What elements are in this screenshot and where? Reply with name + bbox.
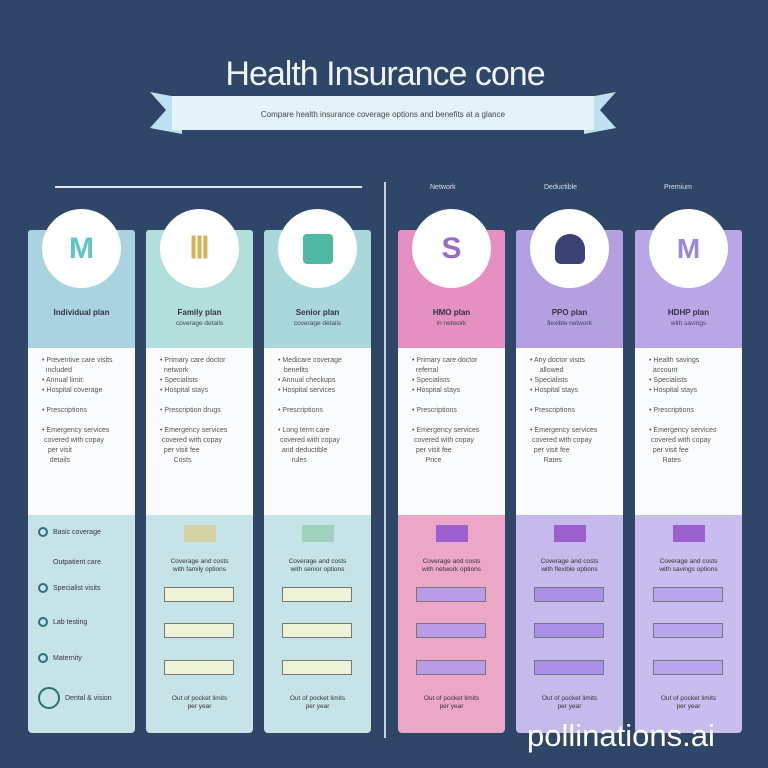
column 3: coverage details — [294, 320, 341, 327]
column 5: allowed — [540, 367, 563, 374]
vertical divider — [384, 182, 386, 738]
column 5: flexible network — [547, 320, 592, 327]
column 3: • Medicare coverage — [278, 357, 342, 364]
column 1: • Preventive care visits — [42, 357, 113, 364]
divider line left — [55, 186, 362, 188]
column 5: with flexible options — [541, 566, 598, 573]
column 1: Individual plan — [53, 308, 110, 317]
column 3: covered with copay — [280, 437, 340, 444]
column 4: HMO plan — [433, 308, 470, 317]
column 1: Specialist visits — [53, 584, 100, 592]
column 1: Outpatient care — [53, 558, 101, 566]
column 3: benefits — [284, 367, 308, 374]
column 6: with savings options — [659, 566, 718, 573]
column 5: per year — [558, 703, 581, 710]
column 2 — [146, 209, 253, 733]
column 5: covered with copay — [532, 437, 592, 444]
column 1: M — [69, 232, 94, 264]
column 3: • Long term care — [278, 427, 329, 434]
column 5 — [516, 209, 623, 733]
column 5: per visit fee — [534, 447, 570, 454]
column 4: per visit fee — [416, 447, 452, 454]
column 2: Coverage and costs — [171, 558, 228, 565]
column 1: Maternity — [53, 654, 82, 662]
column 2: • Prescription drugs — [160, 407, 221, 414]
column 1: • Emergency services — [42, 427, 109, 434]
column 1: Basic coverage — [53, 528, 101, 536]
column 3 — [264, 209, 371, 733]
column 6: per year — [677, 703, 700, 710]
column 1: per visit — [48, 447, 72, 454]
column 1: • Hospital coverage — [42, 387, 102, 394]
column 2: per year — [188, 703, 211, 710]
column 6: with savings — [671, 320, 706, 327]
column 2: Family plan — [177, 308, 222, 317]
column 6: Rates — [663, 457, 681, 464]
right headers: Deductible — [544, 184, 577, 191]
column 4: • Hospital stays — [412, 387, 460, 394]
column 6: Coverage and costs — [660, 558, 717, 565]
column 5: • Prescriptions — [530, 407, 575, 414]
column 5: Coverage and costs — [541, 558, 598, 565]
column 4 — [398, 209, 505, 733]
column 6: • Health savings — [649, 357, 699, 364]
column 1: • Annual limit: — [42, 377, 84, 384]
column 4: • Emergency services — [412, 427, 479, 434]
column 2: • Hospital stays — [160, 387, 208, 394]
column 3: Senior plan — [296, 308, 339, 317]
column 1: covered with copay — [44, 437, 104, 444]
column 1: Lab testing — [53, 618, 87, 626]
column 3: Out of pocket limits — [290, 695, 345, 702]
column 4: in network — [437, 320, 466, 327]
right headers — [430, 184, 692, 191]
column 1: • Prescriptions — [42, 407, 87, 414]
column 3: per year — [306, 703, 329, 710]
column 5: • Any doctor visits — [530, 357, 585, 364]
right headers: Premium — [664, 184, 692, 191]
column 6: account — [653, 367, 677, 374]
column 3: • Annual checkups — [278, 377, 335, 384]
column 1 — [28, 209, 135, 733]
column 2: covered with copay — [162, 437, 222, 444]
column 3: • Prescriptions — [278, 407, 323, 414]
column 6: covered with copay — [651, 437, 711, 444]
column 2: Ⅲ — [189, 232, 210, 265]
column 4: covered with copay — [414, 437, 474, 444]
column 4: Price — [426, 457, 442, 464]
column 6: M — [677, 232, 700, 264]
column 1: included — [46, 367, 72, 374]
column 6: per visit fee — [653, 447, 689, 454]
right headers: Network — [430, 184, 456, 191]
watermark: pollinations.ai — [527, 718, 715, 753]
column 3: Coverage and costs — [289, 558, 346, 565]
column 2: Out of pocket limits — [172, 695, 227, 702]
column 6: • Specialists — [649, 377, 687, 384]
column 4: Coverage and costs — [423, 558, 480, 565]
column 3: rules — [292, 457, 307, 464]
ribbon banner: Compare health insurance coverage options and benefits at a glance — [261, 110, 506, 119]
column 2: Costs — [174, 457, 192, 464]
column 5: Out of pocket limits — [542, 695, 597, 702]
column 5: • Emergency services — [530, 427, 597, 434]
column 2: network — [164, 367, 188, 374]
title: Health Insurance cone — [225, 55, 545, 93]
column 4: per year — [440, 703, 463, 710]
column 4: S — [441, 232, 462, 264]
column 4: • Primary care doctor — [412, 357, 477, 364]
column 6: • Prescriptions — [649, 407, 694, 414]
column 5: PPO plan — [552, 308, 587, 317]
column 4: • Specialists — [412, 377, 450, 384]
column 5: • Hospital stays — [530, 387, 578, 394]
column 2: coverage details — [176, 320, 223, 327]
ribbon banner — [150, 92, 616, 134]
column 2: • Primary care doctor — [160, 357, 225, 364]
column 4: referral — [416, 367, 438, 374]
column 2: • Emergency services — [160, 427, 227, 434]
column 6: HDHP plan — [668, 308, 709, 317]
column 2: with family options — [173, 566, 226, 573]
column 3: with senior options — [291, 566, 344, 573]
column 1: details — [50, 457, 70, 464]
column 6: Out of pocket limits — [661, 695, 716, 702]
column 3: • Hospital services — [278, 387, 335, 394]
column 4: Out of pocket limits — [424, 695, 479, 702]
column 1: Dental & vision — [65, 694, 112, 702]
column 4: with network options — [422, 566, 481, 573]
column 4: • Prescriptions — [412, 407, 457, 414]
column 5: Rates — [544, 457, 562, 464]
column 2: per visit fee — [164, 447, 200, 454]
column 6 — [635, 209, 742, 733]
column 6: • Hospital stays — [649, 387, 697, 394]
column 2: • Specialists — [160, 377, 198, 384]
column 6: • Emergency services — [649, 427, 716, 434]
column 3: and deductible — [282, 447, 327, 454]
column 5: • Specialists — [530, 377, 568, 384]
